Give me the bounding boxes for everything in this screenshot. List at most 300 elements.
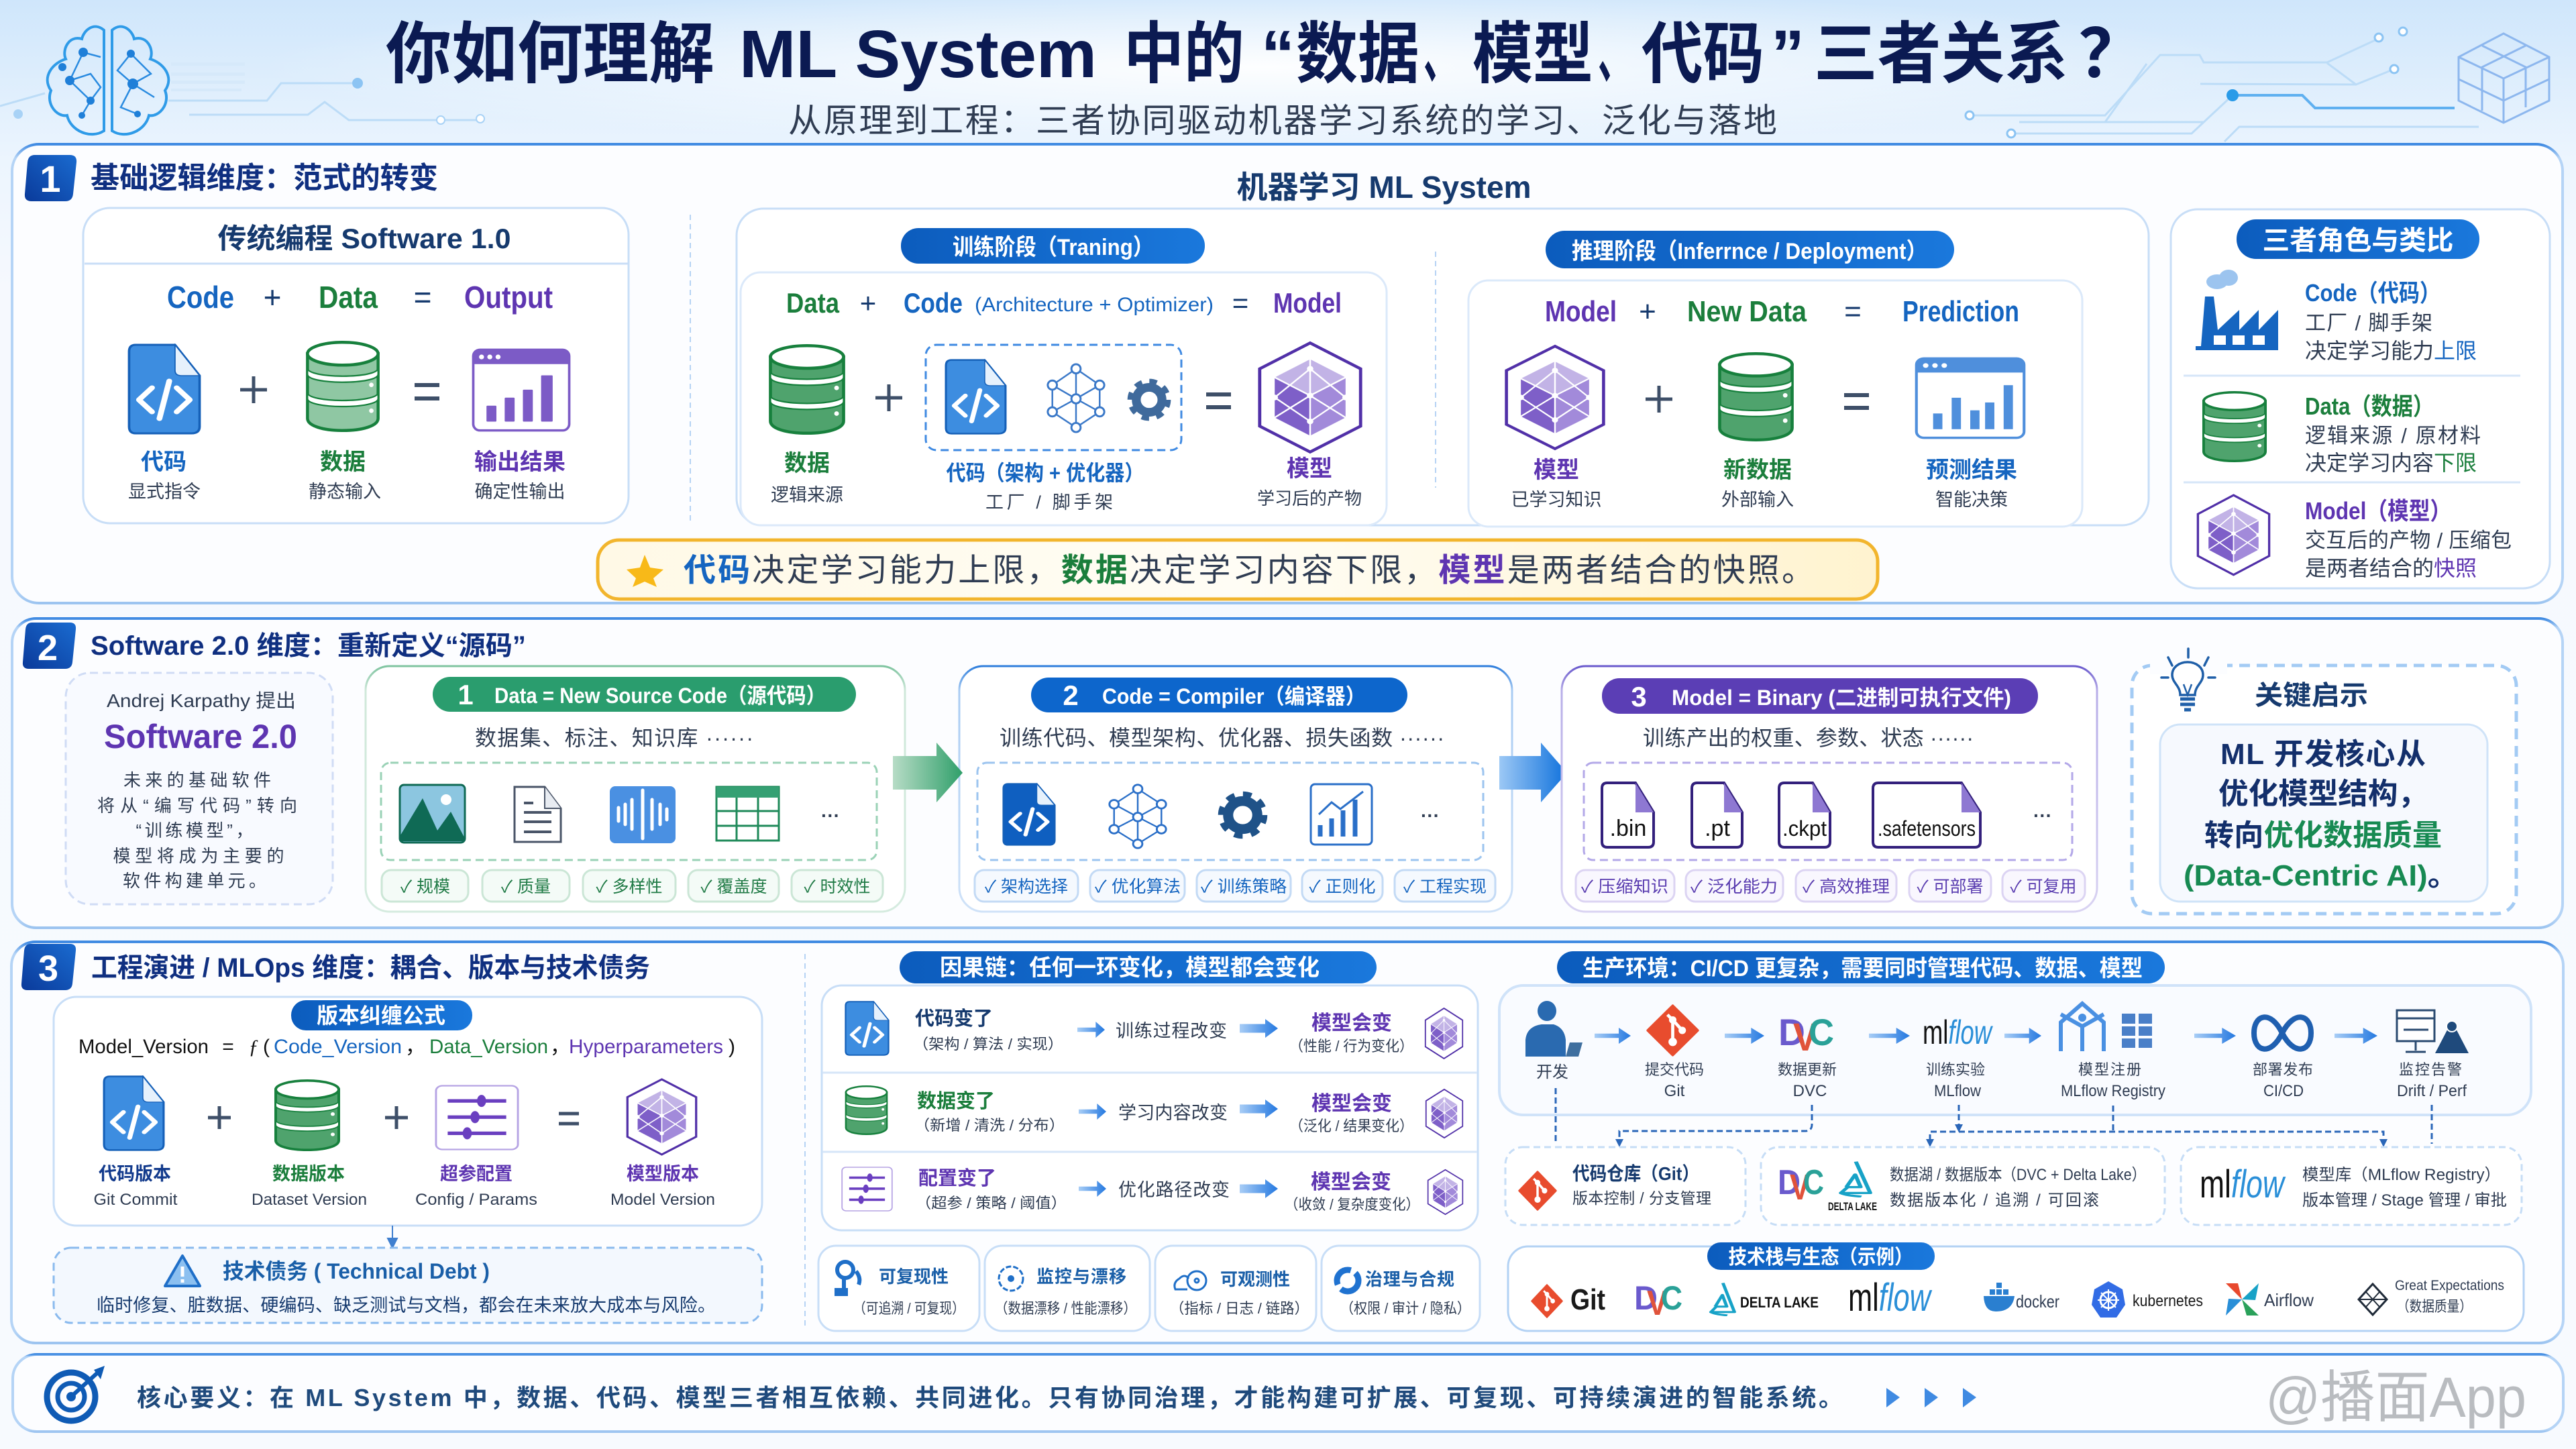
label: 代码(架构 + 优化器): 工厂 / 脚手架	[985, 492, 1113, 513]
sub-panel: training	[741, 272, 1387, 525]
tag chips: ✓ 可复用	[2010, 877, 2077, 896]
role: Code: 工厂 / 脚手架	[2305, 311, 2432, 335]
formula: +	[264, 280, 281, 315]
message box: 转向优化数据质量	[2204, 819, 2442, 852]
message box: ML 开发核心从	[2220, 738, 2426, 771]
tag chips: ✓ 工程实现	[1403, 877, 1487, 896]
step: 部署发布: 部署发布	[2253, 1061, 2313, 1078]
title: “	[1261, 17, 1295, 92]
row: 代码变了: 模型会变	[1311, 1012, 1392, 1034]
operator equals	[559, 1114, 579, 1124]
callout: 三者关系总结	[598, 540, 1878, 599]
role: Code: Code（代码）	[2305, 279, 2440, 307]
tag chips: ✓ 质量	[501, 877, 551, 896]
logo: mlflow: mlflow	[1848, 1276, 1932, 1320]
file: .ckpt	[1779, 783, 1830, 847]
arrow chevrons	[1886, 1388, 1976, 1407]
step: 数据更新: C	[1809, 1011, 1834, 1053]
operator plus	[240, 376, 267, 403]
step: 数据更新: D	[1778, 1011, 1805, 1053]
label: 预测结果: 预测结果	[1926, 458, 2017, 483]
operator plus	[1646, 386, 1672, 413]
pill heading: 三者角色与类比	[2262, 226, 2454, 256]
card: 监控与漂移	[985, 1246, 1150, 1331]
examples box	[977, 763, 1483, 860]
tag chips	[975, 870, 1495, 902]
description: 模型将成为主要的	[113, 846, 284, 866]
step: 数据更新: 数据更新	[1778, 1061, 1837, 1078]
row: 代码变了	[845, 1002, 1462, 1059]
Software 2.0 title: Software 2.0	[104, 718, 297, 755]
file: .ckpt: .ckpt	[1782, 816, 1827, 841]
pill	[433, 677, 856, 712]
callout text: 代码决定学习能力上限，数据决定学习内容下限，模型是两者结合的快照。	[684, 553, 1814, 588]
label: 超参配置: 超参配置	[440, 1164, 513, 1184]
arrow	[2334, 1028, 2377, 1044]
step: 提交代码	[1645, 1006, 1704, 1100]
card: 关键启示	[2132, 649, 2516, 914]
icon: database	[1719, 354, 1792, 440]
card 2: Code = Compiler	[959, 666, 1512, 912]
logo: Great Expectations: （数据质量）	[2397, 1298, 2472, 1315]
training formula: +	[860, 287, 876, 319]
label: 新数据	[1721, 458, 1794, 510]
icon: metrics chart	[1311, 784, 1372, 845]
label: 模型	[1257, 456, 1362, 508]
row: 代码变了: （架构 / 算法 / 实现）	[913, 1036, 1063, 1053]
card: ML system container	[737, 209, 2149, 527]
file: .safetensors: .safetensors	[1878, 816, 1976, 841]
label: 代码	[128, 449, 201, 502]
pill heading: 技术栈与生态（示例）	[1728, 1246, 1913, 1269]
store: 数据湖: D	[1778, 1163, 1801, 1202]
row: 配置变了	[842, 1167, 1462, 1214]
code group: file, network, gear	[926, 345, 1181, 450]
watermark: @播面App	[2265, 1366, 2526, 1429]
step: 开发: 开发	[1536, 1063, 1568, 1081]
label: 输出结果: 输出结果	[474, 449, 566, 475]
badge 3: 3	[38, 949, 58, 989]
operator plus	[208, 1106, 231, 1129]
icon: target	[47, 1366, 105, 1421]
pill heading: 生产环境：CI/CD 更复杂，需要同时管理代码、数据、模型	[1582, 956, 2143, 981]
store: 数据湖: V	[1790, 1167, 1810, 1208]
label: 数据版本: Dataset Version	[252, 1191, 367, 1209]
icon: model hexagon	[1260, 343, 1360, 452]
icon: model hexagon	[1507, 346, 1603, 449]
label: 模型: 模型	[1534, 458, 1579, 483]
role: Model: 是两者结合的快照	[2305, 556, 2477, 580]
icon: prediction chart window	[1917, 358, 2024, 438]
row: 数据变了: 数据变了	[917, 1090, 995, 1112]
label: 代码(架构 + 优化器): 代码（架构 + 优化器）	[946, 461, 1144, 485]
subtitle: 从原理到工程：三者协同驱动机器学习系统的学习、泛化与落地	[788, 102, 1777, 140]
title: ML System	[739, 17, 1097, 92]
store: 模型库: mlflow	[2200, 1163, 2286, 1206]
label: 超参配置: Config / Params	[415, 1191, 537, 1209]
message box	[2160, 724, 2487, 902]
step: 训练实验	[1923, 1014, 1993, 1100]
card: 治理与合规	[1322, 1246, 1480, 1331]
formula: Code	[167, 280, 234, 315]
store: 模型库: 模型库（MLflow Registry）	[2302, 1166, 2501, 1184]
label: 数据: 逻辑来源	[771, 485, 843, 505]
label: 模型版本: Model Version	[610, 1191, 715, 1209]
logo: Airflow	[2226, 1283, 2314, 1316]
logo: Git	[1532, 1283, 1605, 1317]
store: 数据湖: 数据版本化 / 追溯 / 可回滚	[1890, 1191, 2099, 1210]
step: 监控告警	[2397, 1010, 2469, 1100]
core message: 核心要义：在 ML System 中，数据、代码、模型三者相互依赖、共同进化。只有协同治理，才能构建可扩展、可复现、可持续演进的智能系统。	[137, 1384, 1843, 1411]
header decoration: brain and circuit lines	[0, 27, 484, 134]
arrow	[1725, 1028, 1764, 1044]
panel heading: Software 2.0 维度：重新定义“源码”	[91, 631, 526, 661]
icon: database	[307, 342, 378, 431]
title: 模型	[1472, 17, 1593, 92]
arrow	[1869, 1028, 1910, 1044]
step: 数据更新	[1778, 1011, 1837, 1100]
pill	[1602, 678, 2038, 714]
training formula: Code	[904, 287, 963, 319]
card: 传统编程 Software 1.0	[83, 208, 629, 523]
tag chips: ✓ 覆盖度	[700, 877, 767, 896]
description: 训练产出的权重、参数、状态 ······	[1643, 726, 1974, 750]
arrow	[1595, 1028, 1631, 1044]
card: 技术债务	[54, 1248, 762, 1323]
description: 未来的基础软件	[123, 770, 271, 790]
role: Data: 决定学习内容下限	[2305, 451, 2477, 475]
role: Model: Model（模型）	[2305, 497, 2451, 525]
logo: Delta Lake	[1711, 1283, 1819, 1316]
description: 将从“编写代码”转向	[97, 796, 297, 816]
inference formula: Model	[1545, 295, 1617, 328]
pill heading	[2237, 219, 2479, 259]
card 3: Model = Binary	[1562, 666, 2097, 912]
message box: (Data-Centric AI) 。	[2184, 859, 2459, 892]
training formula: =	[1232, 287, 1248, 319]
row: 配置变了: 模型会变	[1311, 1171, 1391, 1193]
label: 模型: 模型	[1287, 456, 1332, 482]
row: 数据变了: 学习内容改变	[1118, 1103, 1228, 1123]
logo: DVC: D	[1634, 1279, 1658, 1317]
row: 配置变了: 优化路径改变	[1118, 1180, 1230, 1200]
pill	[1031, 678, 1407, 712]
operator equals	[1206, 394, 1231, 407]
tag chips: ✓ 压缩知识	[1581, 877, 1668, 896]
formula: Data_Version	[429, 1036, 548, 1058]
label: 数据	[309, 449, 381, 502]
label: 代码版本: Git Commit	[94, 1191, 178, 1209]
step: 数据更新: V	[1793, 1016, 1817, 1059]
description: 临时修复、脏数据、硬编码、缺乏测试与文档，都会在未来放大成本与风险。	[97, 1295, 716, 1316]
operator equals	[415, 385, 439, 398]
label: 数据版本: 数据版本	[272, 1164, 345, 1184]
card: 监控与漂移: （数据漂移 / 性能漂移）	[995, 1300, 1136, 1317]
store: 代码仓库: 版本控制 / 分支管理	[1572, 1189, 1711, 1207]
label: 预测结果: 智能决策	[1935, 490, 2008, 510]
card: 版本纠缠公式	[54, 997, 762, 1226]
badge 1: 1	[40, 158, 61, 200]
icon: audio	[610, 786, 676, 843]
formula: =	[414, 280, 431, 315]
inference formula: =	[1844, 295, 1862, 328]
label: 代码版本: 代码版本	[99, 1164, 171, 1184]
store: 代码仓库: 代码仓库（Git）	[1572, 1163, 1699, 1184]
label: 数据: 数据	[320, 449, 366, 475]
label: 代码: 代码	[141, 449, 186, 475]
badge 1	[25, 155, 76, 201]
logo: Git: Git	[1570, 1283, 1605, 1316]
store: 数据湖	[1761, 1147, 2165, 1225]
inference formula	[1545, 295, 2019, 328]
description: 数据集、标注、知识库 ······	[475, 726, 753, 750]
header decoration: circuit lines and wire cube	[1966, 28, 2549, 142]
heading: 机器学习 ML System: 机器学习 ML System	[1237, 170, 1531, 205]
role: Data: 逻辑来源 / 原材料	[2305, 424, 2481, 447]
panel 2: Software 2.0 维度	[12, 619, 2563, 928]
description: 训练代码、模型架构、优化器、损失函数 ······	[1000, 726, 1444, 750]
label: 模型版本	[610, 1164, 715, 1209]
icon: code file	[104, 1077, 164, 1150]
role: Model: 交互后的产物 / 压缩包	[2305, 529, 2512, 552]
tag chips: ✓ 泛化能力	[1690, 877, 1778, 896]
formula: ，	[405, 1036, 425, 1058]
arrow	[2004, 1028, 2041, 1044]
logo: kubernetes	[2092, 1281, 2203, 1318]
title	[386, 17, 2145, 92]
label: 新数据: 新数据	[1723, 458, 1792, 483]
description: 软件构建单元。	[123, 871, 266, 891]
card: 可复现性: （可追溯 / 可复现）	[853, 1300, 965, 1317]
title: 中的	[1124, 17, 1244, 92]
panel: 核心要义	[13, 1354, 2563, 1432]
label: 数据: 数据	[784, 451, 830, 476]
icon: model hexagon	[2198, 495, 2269, 575]
formula: =	[222, 1036, 234, 1058]
file: .pt	[1692, 783, 1742, 847]
row: 配置变了: （超参 / 策略 / 阈值）	[916, 1195, 1067, 1212]
description: “训练模型”，	[136, 820, 254, 841]
tag chips: ✓ 时效性	[804, 877, 871, 896]
inference formula: New Data	[1687, 295, 1807, 328]
store: 数据湖: C	[1803, 1163, 1824, 1202]
arrow: formula to technical debt	[388, 1226, 397, 1248]
logo: Airflow: Airflow	[2264, 1290, 2314, 1310]
store: 数据湖: 数据湖 / 数据版本（DVC + Delta Lake）	[1890, 1166, 2146, 1184]
tag chips: ✓ 高效推理	[1803, 877, 1890, 896]
logo: kubernetes: kubernetes	[2133, 1292, 2203, 1310]
title: 数据	[1296, 17, 1419, 92]
formula: Model_Version	[78, 1036, 209, 1058]
inference formula: Prediction	[1902, 295, 2019, 328]
icon: warning triangle	[165, 1256, 200, 1286]
pill: 推理阶段	[1546, 231, 1954, 268]
label: 模型	[1511, 458, 1602, 510]
pill heading: 因果链：任何一环变化，模型都会变化	[940, 955, 1320, 981]
more: ···	[2033, 805, 2052, 826]
icon: model hexagon	[627, 1079, 696, 1155]
icon: light bulb	[2161, 649, 2215, 710]
icon: gear	[1221, 794, 1265, 836]
operator equals	[1844, 395, 1869, 408]
badge 2: 2	[38, 628, 58, 668]
pill: 推理阶段: 推理阶段（Inferrnce / Deployment）	[1572, 239, 1927, 264]
label: 数据: 静态输入	[309, 482, 381, 502]
card: 治理与合规: （权限 / 审计 / 隐私）	[1340, 1300, 1470, 1317]
label: 新数据: 外部输入	[1721, 490, 1794, 510]
title: 三者关系	[1814, 17, 2068, 92]
row: 配置变了: 配置变了	[918, 1167, 996, 1189]
step: 训练实验: MLflow	[1934, 1082, 1982, 1100]
panel heading: 工程演进 / MLOps 维度：耦合、版本与技术债务	[91, 953, 650, 983]
file: .safetensors	[1873, 783, 1980, 847]
card heading: 传统编程 Software 1.0	[217, 223, 511, 254]
tech stack	[1508, 1242, 2524, 1331]
badge 3	[21, 944, 76, 990]
pill: Data = New Source Code（源代码）	[494, 684, 826, 708]
pill: 版本纠缠公式	[317, 1004, 445, 1028]
label: 模型版本: 模型版本	[627, 1164, 699, 1184]
label: 超参配置	[415, 1164, 537, 1209]
card 1: Data = New Source Code	[366, 666, 905, 912]
pill: Model = Binary (二进制可执行文件)	[1672, 686, 2011, 710]
logo: docker	[1984, 1283, 2059, 1311]
card: 可观测性: （指标 / 日志 / 链路）	[1170, 1300, 1309, 1317]
logo: DVC	[1634, 1279, 1682, 1323]
title: ？	[2078, 17, 2145, 92]
pipeline flow	[1499, 985, 2531, 1115]
inference formula: +	[1639, 295, 1656, 328]
label: 数据	[771, 451, 843, 505]
heading: 技术债务 ( Technical Debt )	[223, 1259, 490, 1283]
pill: 训练阶段	[901, 228, 1205, 264]
formula: ƒ	[248, 1036, 259, 1058]
icon: network	[1110, 785, 1166, 848]
icon: star	[627, 555, 663, 587]
tag chips	[1576, 870, 2085, 902]
card: 治理与合规: 治理与合规	[1365, 1269, 1454, 1289]
panel heading: 基础逻辑维度：范式的转变	[91, 162, 438, 195]
card: Andrej Karpathy: Andrej Karpathy 提出	[107, 690, 296, 711]
logo: docker: docker	[2016, 1291, 2059, 1311]
label: 预测结果	[1926, 458, 2017, 510]
tag chips: ✓ 架构选择	[985, 877, 1068, 896]
store: 模型库: 版本管理 / Stage 管理 / 审批	[2302, 1191, 2507, 1210]
pill: 训练阶段: 训练阶段（Traning）	[953, 235, 1154, 260]
step: 开发	[1525, 1001, 1582, 1081]
step: 监控告警: Drift / Perf	[2397, 1082, 2467, 1100]
label: 输出结果	[474, 449, 566, 502]
causal chain section	[818, 951, 1480, 1331]
icon: document	[515, 787, 561, 842]
icon: database	[2204, 392, 2265, 461]
row: 代码变了: 代码变了	[915, 1008, 993, 1030]
step: 模型注册: MLflow Registry	[2061, 1082, 2165, 1100]
title: ”	[1771, 17, 1805, 92]
message box: 优化模型结构，	[2218, 777, 2428, 810]
examples box	[1584, 763, 2072, 860]
card: 可复现性	[818, 1246, 979, 1331]
tag chips: ✓ 规模	[400, 877, 450, 896]
pill	[291, 1000, 472, 1030]
row: 数据变了: 模型会变	[1311, 1093, 1392, 1115]
step: 模型注册	[2061, 1004, 2165, 1100]
label: 模型: 学习后的产物	[1257, 488, 1362, 508]
label: 代码: 显式指令	[128, 482, 201, 502]
role: Code: 决定学习能力上限	[2305, 339, 2477, 363]
label: 代码(架构 + 优化器)	[946, 461, 1144, 513]
row: 代码变了: （性能 / 行为变化）	[1289, 1038, 1413, 1055]
logo: DVC: C	[1661, 1279, 1682, 1317]
label: 输出结果: 确定性输出	[475, 482, 565, 502]
training formula: Model	[1273, 287, 1342, 319]
role: Data: Data（数据）	[2305, 392, 2434, 420]
pill heading	[900, 951, 1377, 983]
store: 模型库	[2181, 1147, 2522, 1225]
operator plus	[385, 1106, 408, 1129]
panel 3: 工程演进 / MLOps 维度	[11, 942, 2563, 1343]
pill: 3	[1631, 681, 1647, 712]
more: ···	[1421, 805, 1440, 826]
step: 监控告警: 监控告警	[2399, 1061, 2462, 1078]
tag chips: ✓ 可部署	[1917, 877, 1984, 896]
panel 1: 基础逻辑维度	[12, 144, 2563, 603]
label: 代码版本	[94, 1164, 178, 1209]
step: 模型注册: 模型注册	[2078, 1061, 2141, 1078]
row: 数据变了: （泛化 / 结果变化）	[1289, 1118, 1413, 1134]
formula: (	[263, 1036, 270, 1058]
store: 代码仓库	[1505, 1147, 1746, 1225]
formula: ，	[550, 1036, 570, 1058]
operator plus	[875, 384, 902, 411]
formula: Hyperparameters	[569, 1036, 723, 1058]
pill: 1	[458, 679, 474, 710]
card: 可复现性: 可复现性	[879, 1267, 949, 1287]
icon: database	[276, 1081, 339, 1150]
formula: Code_Version	[274, 1036, 402, 1058]
tag chips: ✓ 多样性	[596, 877, 663, 896]
title: 你如何理解	[386, 17, 714, 92]
tag chips: ✓ 正则化	[1309, 877, 1376, 896]
role: Model	[2305, 497, 2512, 580]
step: 提交代码: Git	[1664, 1082, 1685, 1100]
row: 数据变了: （新增 / 清洗 / 分布）	[914, 1117, 1065, 1134]
file: .bin	[1602, 783, 1654, 847]
icon: code file	[129, 345, 200, 433]
tag chips: ✓ 训练策略	[1201, 877, 1287, 896]
icon: factory	[2196, 270, 2278, 350]
role: Data	[2305, 392, 2481, 475]
arrow: card 1 to card 2	[893, 743, 963, 802]
card: 可观测性: 可观测性	[1220, 1269, 1290, 1289]
card: 可观测性	[1155, 1246, 1316, 1331]
logo: Delta Lake: DELTA LAKE	[1740, 1294, 1819, 1311]
arrow: card 2 to card 3	[1499, 743, 1567, 802]
arrow	[2194, 1028, 2236, 1044]
card: Andrej Karpathy	[66, 673, 333, 904]
step: 提交代码: 提交代码	[1645, 1061, 1704, 1078]
more: ···	[821, 805, 840, 826]
icon: output chart window	[473, 350, 570, 431]
step: 部署发布	[2253, 1017, 2313, 1100]
logo: Great Expectations	[2359, 1278, 2504, 1315]
examples box	[381, 763, 877, 860]
tag chips	[382, 870, 883, 902]
card: 监控与漂移: 监控与漂移	[1036, 1267, 1126, 1287]
step: 数据更新: DVC	[1793, 1082, 1827, 1100]
title: 代码	[1642, 17, 1764, 92]
panel: 三者角色与类比	[2171, 209, 2550, 588]
